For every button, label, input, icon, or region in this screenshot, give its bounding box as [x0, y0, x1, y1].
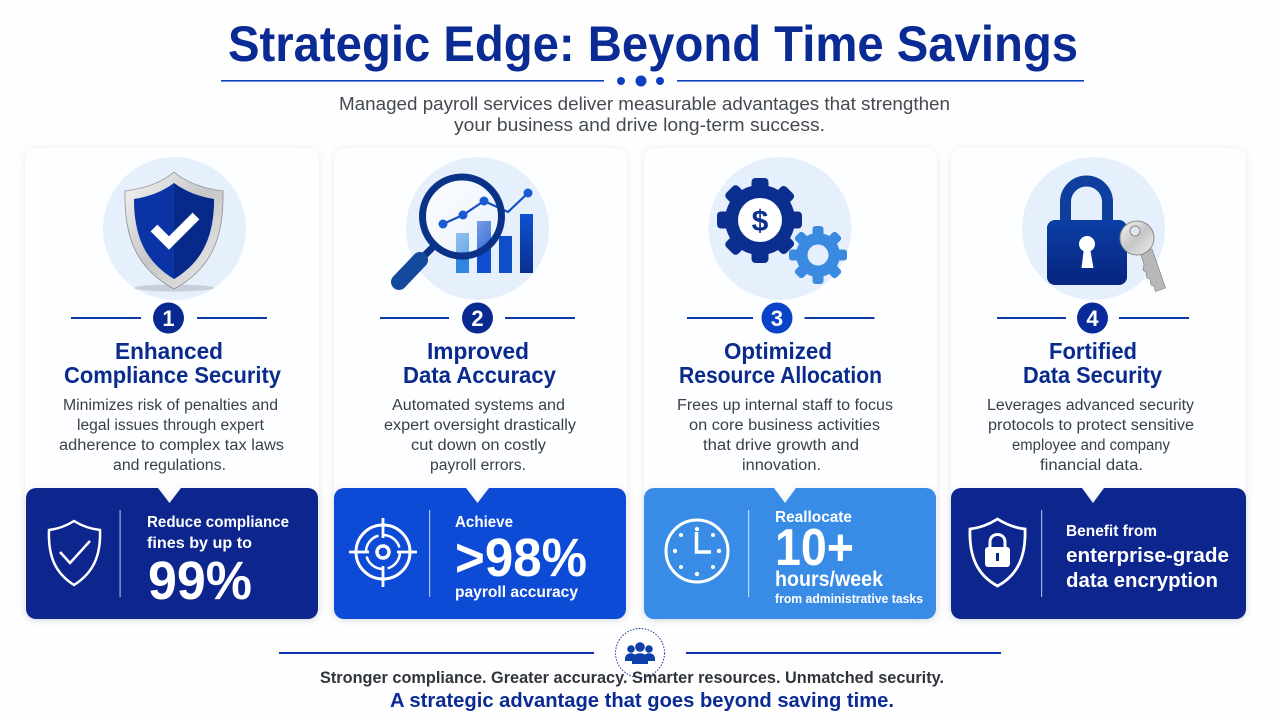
heading: Resource Allocation — [679, 362, 882, 388]
heading: Improved — [427, 338, 529, 364]
body text: cut down on costly — [411, 437, 546, 454]
number badge 2: 2 — [471, 306, 484, 331]
panel: improved data accuracy — [334, 148, 627, 619]
stat: >98%: payroll accuracy — [455, 584, 578, 601]
subtitle: Managed payroll services deliver measurable advantages that strengthen — [339, 94, 950, 114]
body text: payroll errors. — [430, 457, 526, 474]
number badge 4 — [997, 302, 1189, 334]
number badge 1: 1 — [162, 306, 175, 331]
heading — [403, 338, 556, 388]
heading: Data Security — [1023, 362, 1162, 388]
number badge 2 — [380, 302, 575, 334]
icon: people group — [616, 628, 664, 678]
heading: Optimized — [724, 338, 832, 364]
body text — [677, 397, 893, 474]
footer tagline — [320, 669, 944, 712]
stat: 99%: fines by up to — [147, 535, 252, 552]
stat: 10+ hours/week: 10+ — [775, 519, 854, 577]
body text: Automated systems and — [392, 397, 565, 414]
heading: Compliance Security — [64, 362, 281, 388]
heading: Data Accuracy — [403, 362, 556, 388]
number badge 1 — [71, 302, 267, 334]
stat: >98%: Achieve — [455, 514, 513, 531]
stat: enterprise-grade encryption: enterprise-grade — [1066, 544, 1229, 567]
icon: target — [349, 518, 417, 587]
number badge 3: 3 — [771, 306, 783, 331]
title: Strategic Edge: Beyond Time Savings — [228, 16, 1078, 72]
heading — [679, 338, 882, 388]
heading: Fortified — [1049, 338, 1137, 364]
body text: on core business activities — [689, 417, 880, 434]
body text — [384, 397, 576, 474]
stat: 10+ hours/week: hours/week — [775, 568, 883, 591]
subtitle — [339, 94, 950, 135]
stat: 10+ hours/week — [644, 488, 936, 619]
heading — [1023, 338, 1162, 388]
body text: that drive growth and — [703, 437, 859, 454]
icon: shield with checkmark — [125, 172, 223, 292]
body text: protocols to protect sensitive — [988, 417, 1194, 434]
heading: Enhanced — [115, 338, 223, 364]
stat: 99%: Reduce compliance — [147, 514, 289, 531]
stat: >98% — [334, 488, 626, 619]
body text — [987, 397, 1194, 474]
icon: magnifier over bar chart — [399, 177, 533, 282]
stat: 99%: 99% — [148, 551, 252, 611]
body text: adherence to complex tax laws — [59, 437, 284, 454]
icon: gears with dollar sign — [717, 178, 847, 284]
body text: employee and company — [1012, 437, 1170, 454]
body text: Minimizes risk of penalties and — [63, 397, 278, 414]
icon: outline shield — [49, 521, 100, 585]
stat: 99% — [26, 488, 318, 619]
icon: clock — [666, 520, 728, 582]
body text — [59, 397, 284, 474]
heading — [64, 338, 281, 388]
panel: fortified data security — [951, 148, 1246, 619]
stat: enterprise-grade encryption: data encryption — [1066, 569, 1218, 592]
stat: 10+ hours/week: Reallocate — [775, 509, 852, 526]
body text: and regulations. — [113, 457, 226, 474]
panel: optimized resource allocation — [644, 148, 937, 619]
icon: shield with padlock — [970, 519, 1025, 586]
subtitle: your business and drive long-term success. — [454, 115, 825, 135]
stat: >98%: >98% — [455, 528, 587, 588]
body text: expert oversight drastically — [384, 417, 576, 434]
body text: Frees up internal staff to focus — [677, 397, 893, 414]
body text: innovation. — [742, 457, 821, 474]
footer divider — [279, 652, 1001, 654]
body text: legal issues through expert — [77, 417, 265, 434]
icon: gears with dollar sign: $ — [752, 205, 769, 238]
stat: enterprise-grade encryption: Benefit from — [1066, 523, 1157, 540]
title divider with dots — [221, 76, 1084, 86]
number badge 3 — [687, 302, 874, 334]
panel: enhanced compliance security — [25, 148, 319, 619]
icon: padlock and key — [1047, 181, 1166, 292]
stat: enterprise-grade encryption — [951, 488, 1246, 619]
body text: financial data. — [1040, 457, 1143, 474]
body text: Leverages advanced security — [987, 397, 1194, 414]
number badge 4: 4 — [1086, 306, 1099, 331]
stat: 10+ hours/week: from administrative tasks — [775, 591, 923, 606]
footer tagline: Stronger compliance. Greater accuracy. Smarter resources. Unmatched security. — [320, 669, 944, 687]
footer tagline: A strategic advantage that goes beyond saving time. — [390, 689, 894, 712]
